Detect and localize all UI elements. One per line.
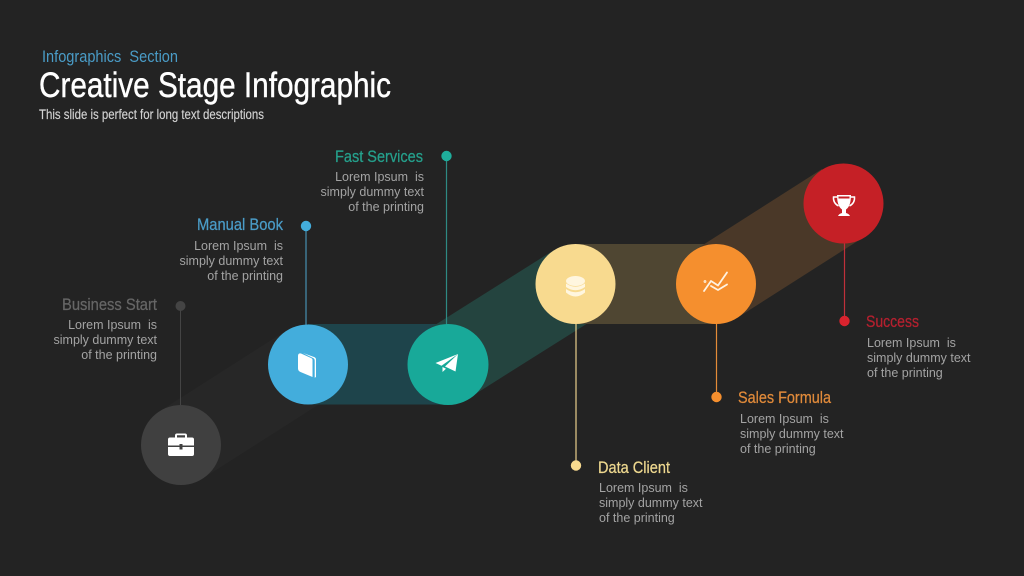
connector line (844, 242, 846, 321)
description: of the printing (599, 511, 675, 525)
description: simply dummy text (54, 333, 158, 347)
title: Creative Stage Infographic (39, 66, 391, 105)
description: of the printing (207, 269, 283, 283)
marker dot (301, 221, 311, 231)
description: Lorem Ipsum is (194, 239, 283, 253)
node: database (536, 244, 616, 324)
description: simply dummy text (180, 254, 284, 268)
heading: Fast Services (335, 147, 423, 166)
heading: Manual Book (197, 215, 283, 234)
marker dot (839, 316, 850, 326)
step: Data Client (571, 322, 703, 525)
heading: Data Client (598, 458, 670, 477)
section label: Infographics Section (42, 47, 178, 66)
step: Manual Book (180, 215, 311, 325)
connector line (446, 156, 448, 325)
heading: Success (866, 312, 919, 331)
subtitle: This slide is perfect for long text descriptions (39, 107, 264, 122)
heading: Sales Formula (738, 388, 831, 407)
marker dot (176, 301, 186, 311)
description: simply dummy text (867, 351, 971, 365)
connector line (305, 226, 307, 325)
icon: trophy (833, 195, 855, 216)
description: of the printing (81, 348, 157, 362)
connector line (180, 306, 182, 406)
icon: briefcase (168, 434, 194, 456)
marker dot (441, 151, 452, 161)
description: of the printing (348, 200, 424, 214)
description: Lorem Ipsum is (68, 318, 157, 332)
marker dot (711, 392, 722, 402)
icon: database (566, 276, 585, 296)
step: Sales Formula (711, 322, 844, 456)
icon: paper plane (436, 354, 458, 372)
description: Lorem Ipsum is (867, 336, 956, 350)
icon: book (298, 353, 316, 378)
icon: trend lines (704, 272, 727, 291)
header (39, 47, 391, 122)
node: paper plane (408, 324, 488, 405)
step: Business Start (54, 295, 186, 406)
step: Success (839, 242, 971, 380)
marker dot (571, 460, 581, 471)
heading: Business Start (62, 295, 157, 314)
band: services to data (427, 250, 596, 398)
step: Fast Services (320, 147, 452, 325)
description: Lorem Ipsum is (335, 170, 424, 184)
stage path bands (160, 169, 864, 479)
band: manual to services (308, 324, 448, 404)
description: of the printing (740, 442, 816, 456)
band: sales to success (695, 169, 864, 318)
description: Lorem Ipsum is (599, 481, 688, 495)
node: briefcase (141, 405, 221, 485)
description: simply dummy text (740, 427, 844, 441)
connector line (575, 322, 577, 465)
connector line (716, 322, 718, 397)
node: chart (676, 244, 756, 324)
band: data to sales (575, 244, 716, 324)
description: Lorem Ipsum is (740, 412, 829, 426)
node: book (268, 324, 348, 404)
description: simply dummy text (320, 185, 425, 199)
node: trophy (804, 164, 884, 244)
description: of the printing (867, 366, 943, 380)
description: simply dummy text (599, 496, 703, 510)
band: start to manual (160, 330, 329, 479)
